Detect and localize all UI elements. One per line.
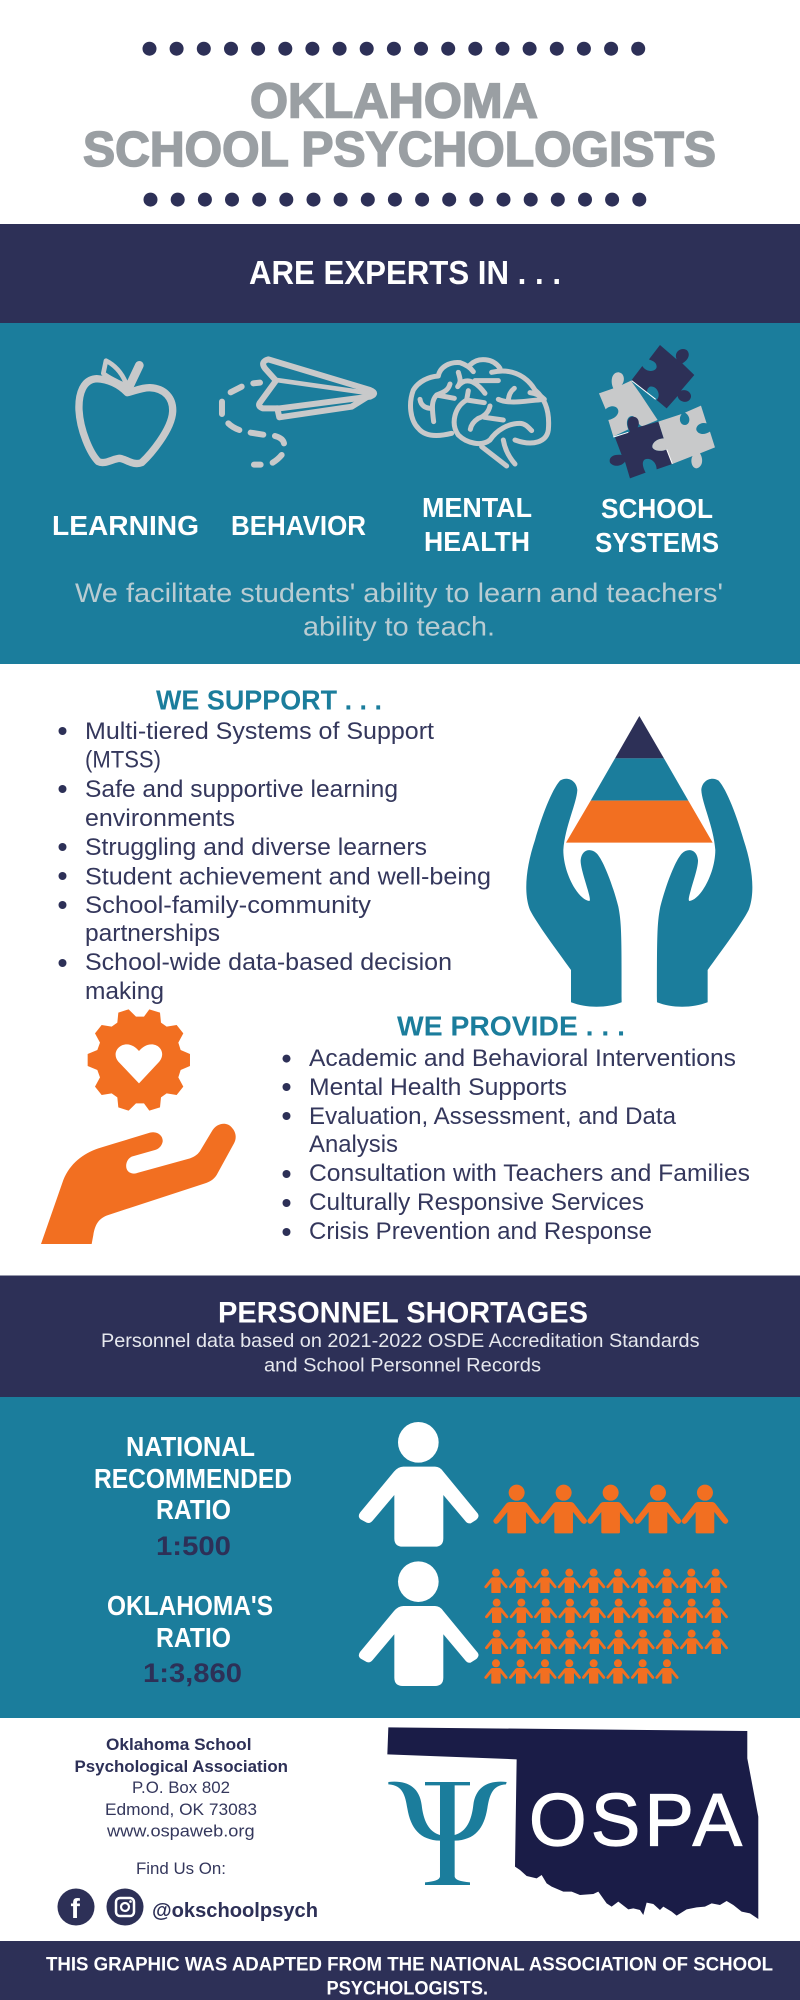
list: provide items: Crisis Prevention and Response [309, 1218, 652, 1245]
text: data source note [101, 1330, 700, 1376]
list: support items: partnerships [85, 920, 220, 947]
text: attribution [46, 1954, 773, 1999]
label: national recommended ratio: RECOMMENDED [94, 1463, 292, 1494]
text: attribution: THIS GRAPHIC WAS ADAPTED FROM THE NATIONAL ASSOCIATION OF SCHOOL [46, 1954, 773, 1976]
list: support items [58, 718, 491, 1005]
text: ospa wordmark: OSPA [529, 1778, 743, 1862]
text: address [105, 1778, 257, 1841]
text: address: www.ospaweb.org [106, 1822, 255, 1841]
label: behavior: BEHAVIOR [231, 510, 366, 541]
dotted rule: bottom [144, 193, 646, 207]
text: facilitate statement [75, 578, 723, 642]
label: school systems [595, 493, 719, 558]
list: support items: making [85, 978, 164, 1005]
icon: psi symbol [388, 1782, 507, 1885]
label: school systems: SYSTEMS [595, 527, 719, 558]
text: address: Edmond, OK 73083 [105, 1800, 257, 1819]
band: are experts in [0, 224, 800, 323]
header [83, 42, 716, 207]
heading: we support: WE SUPPORT . . . [156, 684, 382, 715]
band: personnel shortages [0, 1276, 800, 1397]
list: support items: environments [85, 805, 235, 832]
icon: paper airplane [222, 359, 374, 465]
heading: personnel shortages: PERSONNEL SHORTAGES [218, 1297, 588, 1330]
icon: psychologist oklahoma [359, 1561, 479, 1686]
number: 1:500: 1:500 [156, 1531, 231, 1561]
label: national recommended ratio [94, 1431, 292, 1525]
text: address: P.O. Box 802 [132, 1778, 230, 1797]
label: national recommended ratio: NATIONAL [126, 1431, 255, 1462]
label: oklahoma's ratio [107, 1590, 273, 1653]
logo: ospa [387, 1727, 758, 1919]
text: facilitate statement: ability to teach. [303, 612, 495, 642]
text: association name [74, 1735, 288, 1776]
list: support items: (MTSS) [85, 746, 161, 774]
pictogram: many students [484, 1569, 728, 1684]
icon: open hand [41, 1124, 236, 1244]
list: support items: Struggling and diverse learners [85, 834, 427, 861]
panel: expertise areas [0, 323, 800, 664]
text: find us on: Find Us On: [136, 1859, 226, 1878]
number: 1:3,860: 1:3,860 [143, 1658, 242, 1688]
shape: oklahoma map [387, 1727, 758, 1919]
dotted rule: top [142, 42, 645, 56]
panel: we support [58, 684, 752, 1007]
icon: facebook: f [70, 1893, 80, 1924]
list: provide items: Academic and Behavioral Interventions [309, 1045, 736, 1072]
text: attribution: PSYCHOLOGISTS. [326, 1977, 488, 1999]
heading: are experts in: ARE EXPERTS IN . . . [249, 254, 561, 291]
label: oklahoma's ratio: RATIO [156, 1622, 231, 1653]
heading: we provide: WE PROVIDE . . . [397, 1011, 625, 1042]
panel: contact [58, 1727, 758, 1926]
text: social handle: @okschoolpsych [152, 1900, 318, 1922]
text: data source note: and School Personnel Records [264, 1354, 541, 1376]
icon: gear with heart [88, 1009, 190, 1111]
title: SCHOOL PSYCHOLOGISTS [83, 123, 716, 177]
text: facilitate statement: We facilitate students' ability to learn and teachers' [75, 578, 723, 608]
panel: ratios [0, 1397, 800, 1718]
footer band [0, 1941, 800, 2000]
list: support items: Multi-tiered Systems of Support [85, 718, 434, 745]
list: support items: School-wide data-based decision [85, 949, 452, 976]
list: provide items: Culturally Responsive Services [309, 1189, 644, 1216]
label: school systems: SCHOOL [601, 493, 713, 524]
label: national recommended ratio: RATIO [156, 1494, 231, 1525]
icon: puzzle pieces [599, 345, 715, 478]
text: data source note: Personnel data based on 2021-2022 OSDE Accreditation Standards [101, 1330, 700, 1352]
label: oklahoma's ratio: OKLAHOMA'S [107, 1590, 273, 1621]
pictogram: five students [493, 1485, 728, 1533]
text: association name: Psychological Association [74, 1757, 288, 1776]
list: provide items [282, 1045, 750, 1245]
label: mental health [422, 492, 532, 557]
icon: instagram [106, 1888, 144, 1926]
title [83, 74, 716, 177]
label: learning: LEARNING [52, 510, 199, 541]
list: provide items: Consultation with Teachers and Families [309, 1160, 750, 1187]
list: provide items: Mental Health Supports [309, 1074, 567, 1101]
panel: we provide [41, 1009, 750, 1245]
icon: psychologist national [359, 1422, 479, 1547]
icon: hands holding pyramid [526, 716, 752, 1007]
list: support items: School-family-community [85, 892, 371, 919]
title: OKLAHOMA [250, 74, 538, 128]
label: mental health: MENTAL [422, 492, 532, 523]
icon: facebook [58, 1888, 94, 1926]
list: provide items: Evaluation, Assessment, and Data [309, 1103, 677, 1130]
list: support items: Safe and supportive learning [85, 776, 398, 803]
icon: brain [411, 360, 549, 466]
label: mental health: HEALTH [424, 526, 530, 557]
list: support items: Student achievement and well-being [85, 864, 491, 891]
icon: apple [79, 361, 173, 464]
list: provide items: Analysis [309, 1131, 398, 1158]
text: association name: Oklahoma School [106, 1735, 252, 1754]
